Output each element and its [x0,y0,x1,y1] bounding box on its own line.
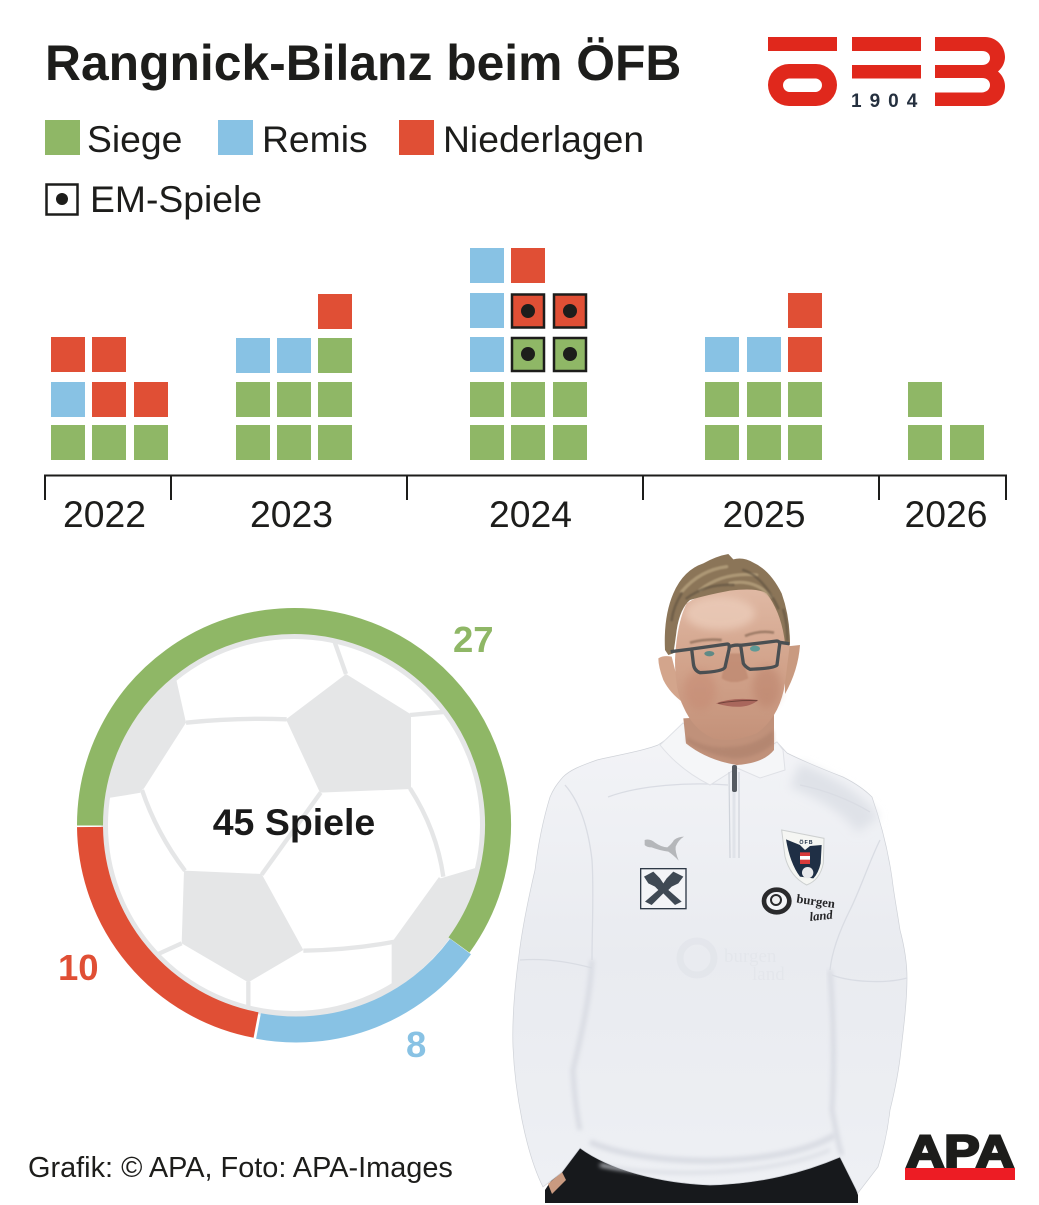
head [658,554,800,765]
legend item: EM-Spiele: EM-Spiele [90,178,262,220]
brows [690,632,774,643]
trousers [545,1140,858,1203]
year labels: 2026 [905,493,987,535]
ring segment: Siege 27 [90,621,498,945]
nose [722,653,748,682]
logo: Raiffeisen [641,869,686,909]
column group: 2023 [236,294,352,460]
football background [93,636,483,1014]
legend item: Siege [45,118,182,160]
logo: ÖFB crest [782,830,824,885]
logo: Burgenland [764,890,836,924]
photo: Ralf Rangnick illustration [513,554,907,1203]
chest logos [641,830,836,924]
donut chart: 45 Spiele [58,619,498,1065]
legend item: Niederlagen: Niederlagen [443,118,644,160]
legend item: Remis: Remis [262,118,368,160]
face [675,588,790,740]
source credit: Grafik: © APA, Foto: APA-Images [28,1152,453,1184]
legend item: Siege: Siege [87,118,182,160]
EM match markers [512,294,586,371]
title: Rangnick-Bilanz beim ÖFB [45,35,681,91]
column group: 2026 [908,382,984,460]
year labels: 2025 [723,493,805,535]
ghost sponsor print [680,941,785,985]
hair [665,554,790,655]
collar and zip [660,723,785,858]
year labels: 2022 [63,493,146,535]
legend [45,118,644,220]
glasses [671,641,789,673]
ghost sponsor print: burgen [724,946,777,967]
value: 27: 27 [453,619,494,660]
neck [683,713,774,765]
logo: Burgenland: land [809,908,834,924]
timeline axis [45,476,1006,535]
ears [658,656,683,703]
logo: ÖFB 1904: 1904 [851,91,925,112]
logo: Puma [645,837,684,861]
ghost sponsor print: land [752,964,785,985]
year labels: 2024 [489,493,572,535]
value: 8: 8 [406,1024,426,1065]
column group: 2022 [51,337,168,460]
ring segment: Niederlagen 10 [90,827,256,1025]
logo: APA: APA [906,1126,1014,1177]
sweater [513,723,907,1193]
mouth [716,699,758,707]
logo: ÖFB 1904 [768,37,1005,112]
sweater shading [520,775,907,1173]
centre label: 45 Spiele [213,801,375,843]
logo: ÖFB crest: ÖFB [799,839,814,846]
pictogram chart: results per year [51,248,984,460]
value: 10: 10 [58,947,99,988]
ring segment: Remis 8 [258,946,460,1030]
logo: Burgenland: burgen [796,892,836,911]
year labels: 2023 [250,493,333,535]
eyes [704,651,714,656]
year labels [63,493,987,535]
column group: 2024 [470,248,587,460]
column group: 2025 [705,293,822,460]
